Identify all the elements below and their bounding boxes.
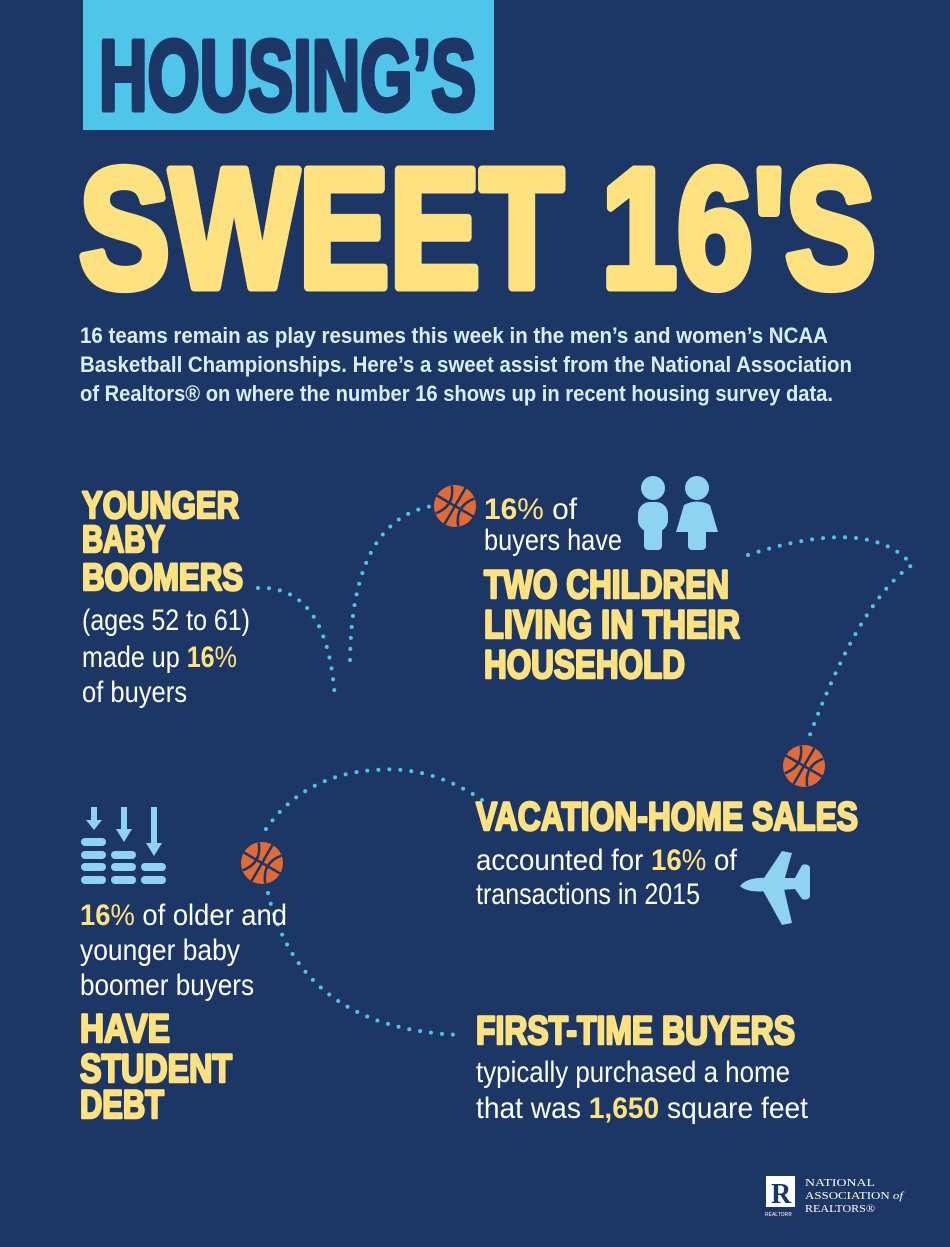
panel: student debt: STUDENT [80,1047,232,1091]
panel: student debt: younger baby [80,934,240,967]
panel: two children: HOUSEHOLD [484,643,685,687]
icon: basketball 2 [775,737,833,795]
intro text [80,323,852,406]
panel: first-time buyers [476,1009,809,1125]
panel: first-time buyers: FIRST-TIME BUYERS [476,1009,795,1053]
icon: basketball 3 [233,834,291,892]
panel: first-time buyers: that was 1,650 square feet [476,1092,809,1125]
icon: children [638,476,718,550]
panel: student debt: HAVE [80,1007,170,1051]
panel: two children [484,493,740,687]
title box: HOUSING'S [83,0,494,132]
icon: airplane [740,851,810,925]
panel: first-time buyers: typically purchased a home [476,1056,790,1089]
intro text: Basketball Championships. Here’s a sweet assist from the National Association [80,352,852,377]
panel: two children: TWO CHILDREN [484,563,729,607]
panel: younger baby boomers: of buyers [82,676,187,709]
intro text: of Realtors® on where the number 16 shows up in recent housing survey data. [80,381,833,406]
intro text: 16 teams remain as play resumes this week in the men’s and women’s NCAA [80,323,828,348]
title box: HOUSING'S: HOUSING’S [99,20,476,132]
panel: vacation-home sales [476,795,858,911]
panel: younger baby boomers: made up 16% [82,641,237,674]
panel: younger baby boomers: BOOMERS [82,557,243,599]
panel: younger baby boomers: (ages 52 to 61) [82,604,250,637]
icon: student debt arrows and coins [81,807,166,884]
panel: student debt: boomer buyers [80,969,254,1002]
panel: two children: LIVING IN THEIR [484,603,740,647]
dotted paths [258,506,912,1035]
logo: National Association of Realtors: REALTORS® [805,1203,875,1215]
panel: student debt: DEBT [80,1083,164,1127]
panel: vacation-home sales: transactions in 2015 [476,878,700,911]
icon: basketball 1 [426,477,484,535]
panel: student debt [80,899,287,1127]
panel: two children: buyers have [484,524,622,557]
panel: younger baby boomers: BABY [82,519,165,561]
panel: student debt: 16% of older and [80,899,287,932]
logo: National Association of Realtors: REALTOR® [765,1211,792,1218]
panel: vacation-home sales: accounted for 16% of [476,844,738,877]
panel: vacation-home sales: VACATION-HOME SALES [476,795,858,839]
panel: younger baby boomers: YOUNGER [82,485,239,527]
logo: National Association of Realtors: NATIONAL [805,1177,875,1189]
logo: National Association of Realtors [765,1176,905,1218]
panel: younger baby boomers [82,485,250,709]
logo: National Association of Realtors: ASSOCIATION of [805,1190,905,1202]
panel: two children: 16% of [484,493,578,526]
logo: National Association of Realtors: R [771,1179,792,1210]
